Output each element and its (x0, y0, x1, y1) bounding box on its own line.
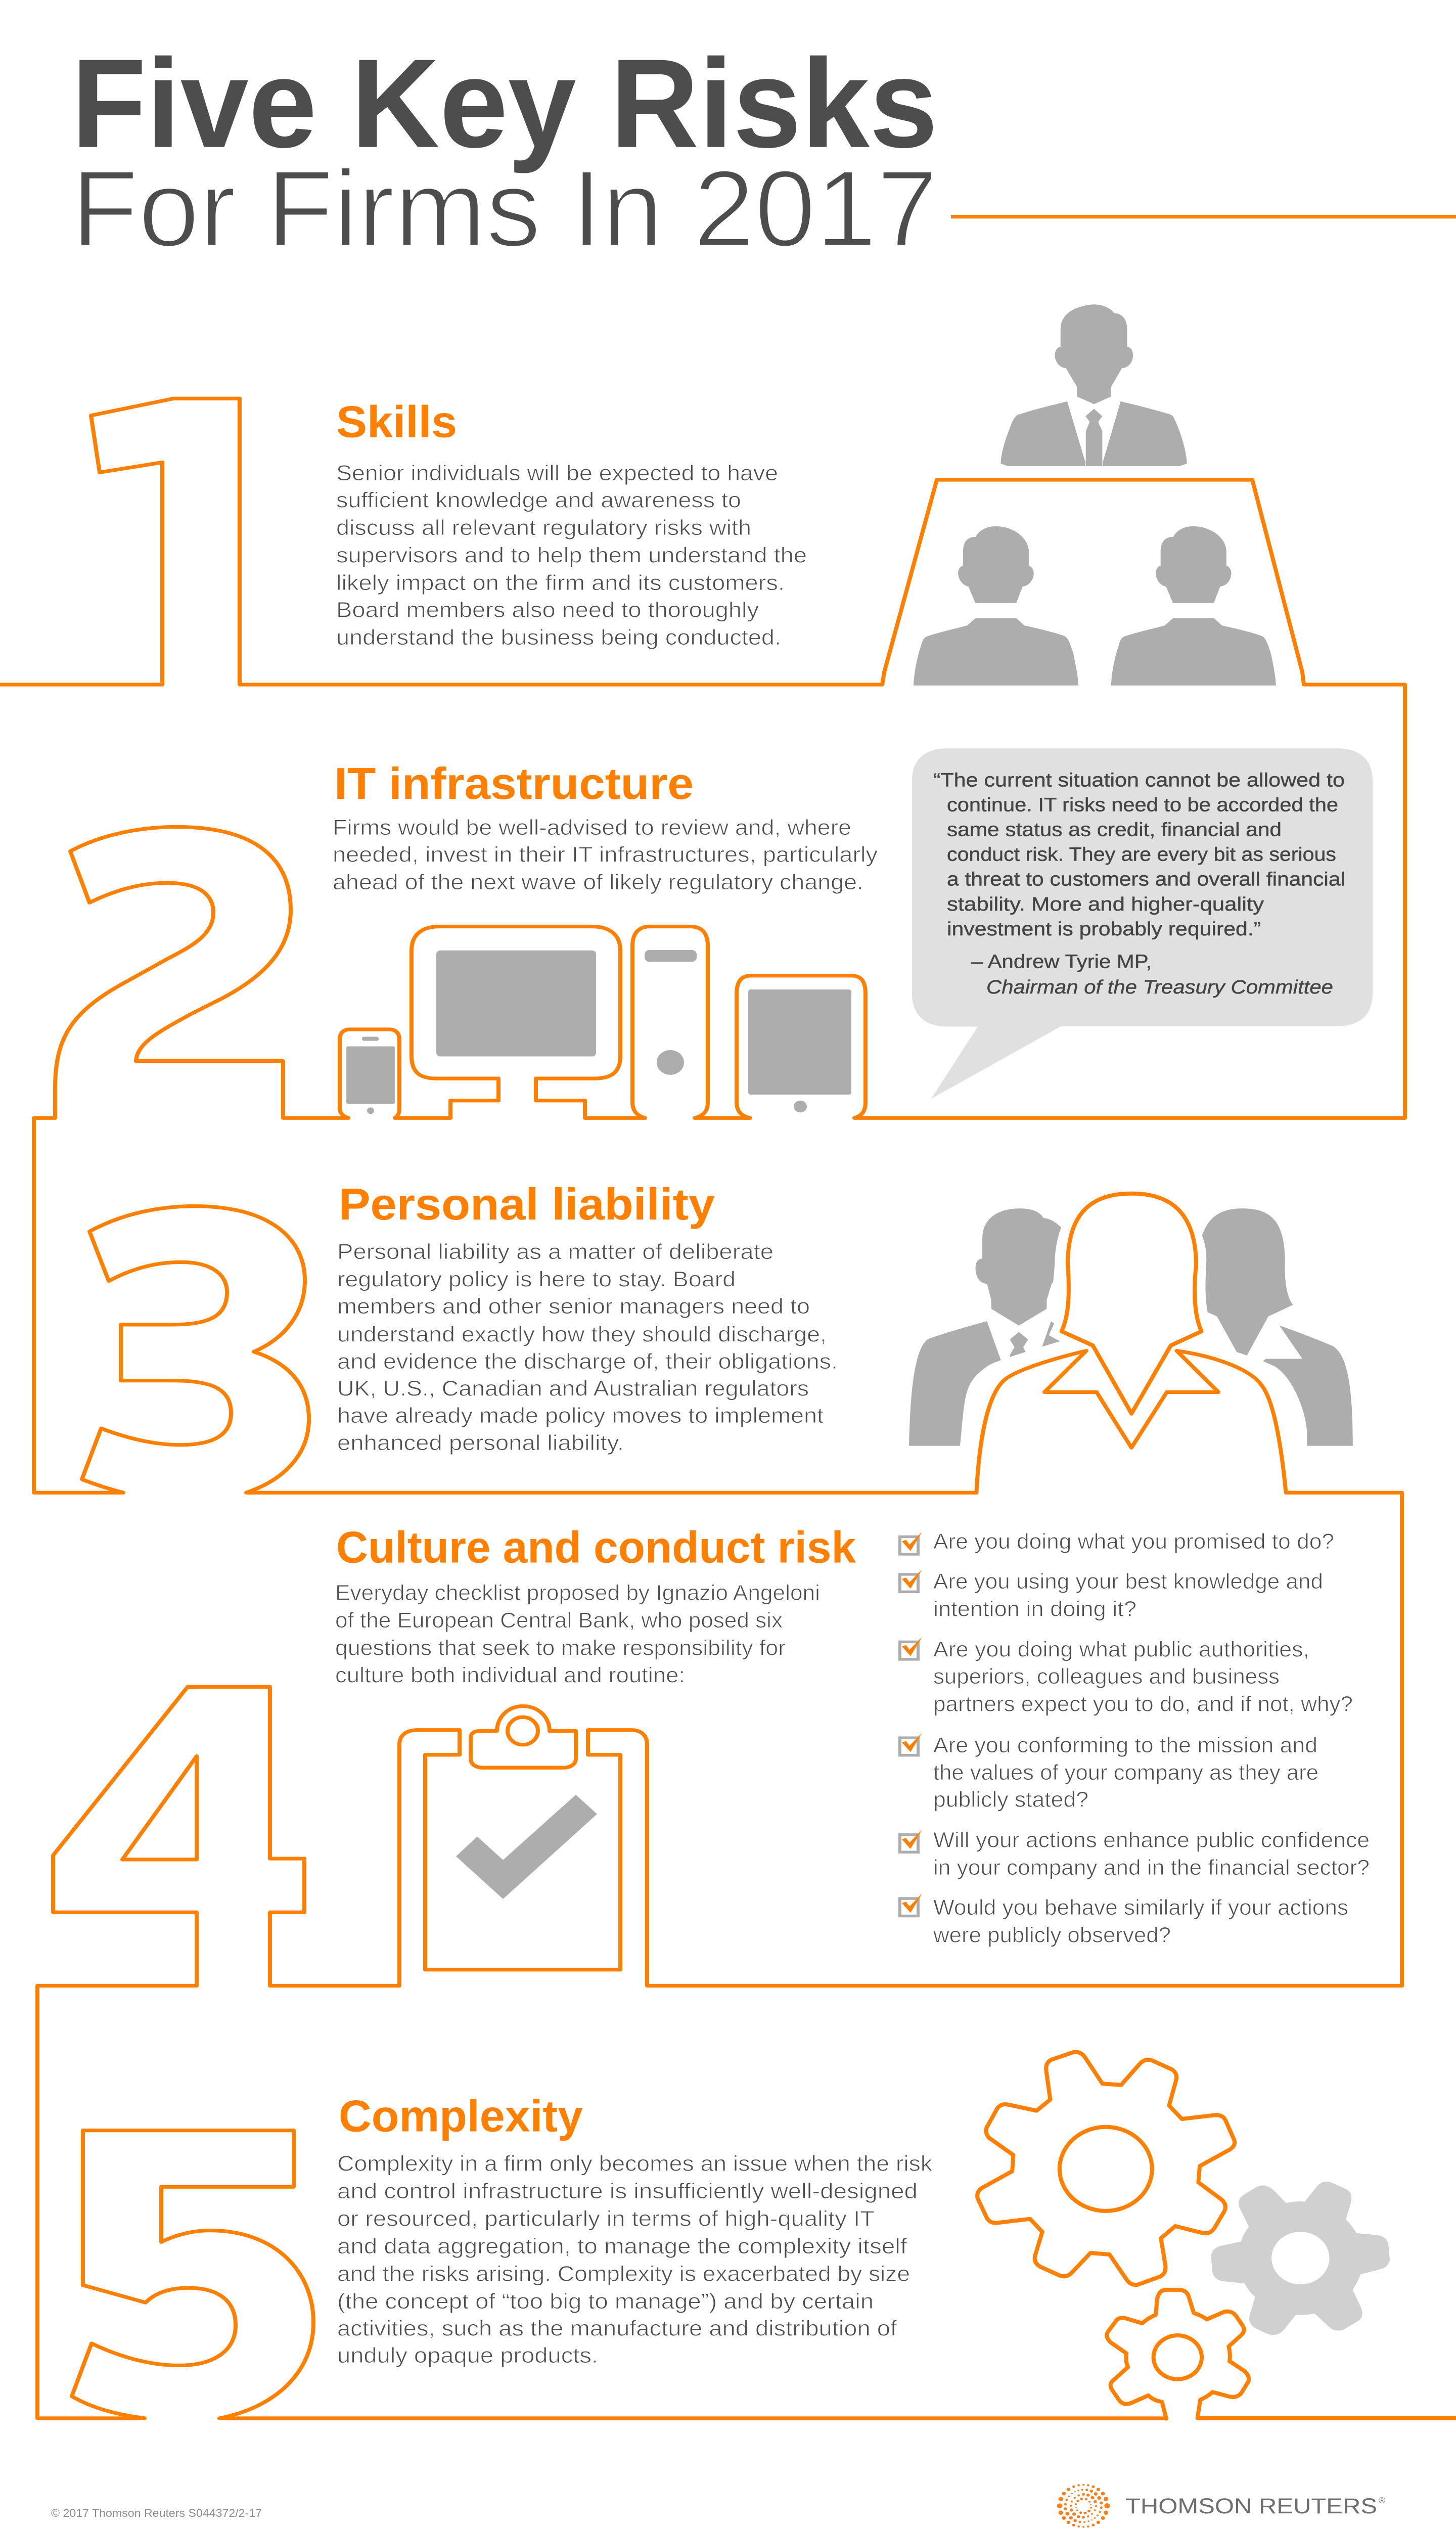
check item 3 (900, 1637, 1353, 1716)
callout: quote bubble: same status as credit, financial and (947, 819, 1282, 840)
icon: small orange gear (1107, 2290, 1456, 2419)
check item 2: intention in doing it? (933, 1597, 1136, 1621)
icon: board members at table (914, 304, 1276, 686)
heading: Skills: Skills (336, 397, 457, 447)
panel: 1 skills (336, 304, 1276, 686)
continuous orange outline forming numerals 1 to 5, table and device shapes (0, 398, 1405, 2418)
logo: Thomson Reuters (1057, 2484, 1386, 2528)
text block: complexity description: activities, such as the manufacture and distribution of (337, 2316, 897, 2340)
text block: skills description: understand the business being conducted. (336, 625, 781, 649)
icon: numeral 4 counter (122, 1756, 197, 1860)
text block: liability description: understand exactly how they should discharge, (337, 1322, 827, 1346)
text block: liability description: members and other senior managers need to (337, 1294, 810, 1319)
icon: three managers (909, 1194, 1353, 1446)
text block: complexity description: Complexity in a firm only becomes an issue when the risk (337, 2151, 933, 2176)
text block: liability description: Personal liability as a matter of deliberate (337, 1239, 774, 1264)
callout: quote bubble: Chairman of the Treasury Committee (986, 977, 1333, 998)
icon: tablet details (748, 989, 851, 1112)
heading: Personal liability: Personal liability (339, 1179, 715, 1229)
check item 4: Are you conforming to the mission and (933, 1733, 1317, 1757)
checklist (900, 1529, 1370, 1947)
text block: skills description: likely impact on the firm and its customers. (336, 570, 785, 595)
panel: 5 complexity (337, 2052, 1456, 2419)
check item 6: were publicly observed? (933, 1922, 1171, 1947)
text block: skills description: Senior individuals will be expected to have (336, 461, 778, 485)
icon: monitor screen (436, 951, 596, 1057)
text block: liability description: have already made policy moves to implement (337, 1403, 824, 1428)
logo wordmark: THOMSON REUTERS (1125, 2494, 1377, 2518)
icon: seated member left (914, 526, 1078, 686)
text block: skills description: supervisors and to help them understand the (336, 543, 807, 567)
icon: male manager (909, 1208, 1061, 1446)
icon: tower details (645, 950, 697, 1075)
text block: skills description (336, 461, 807, 649)
icon: clipboard clip (471, 1706, 576, 1768)
panel: 4 culture and conduct risk (122, 1522, 1370, 1947)
text block: complexity description: and data aggregation, to manage the complexity itself (337, 2234, 907, 2258)
icon: chairman (1000, 304, 1187, 466)
callout: quote bubble: conduct risk. They are every bit as serious (947, 844, 1336, 865)
text block: complexity description: or resourced, particularly in terms of high-quality IT (337, 2206, 875, 2231)
text block: complexity description: (the concept of “too big to manage”) and by certain (337, 2289, 874, 2313)
check item 5: in your company and in the financial sector? (933, 1855, 1370, 1879)
icon: large orange gear (977, 2052, 1235, 2285)
text block: IT description: needed, invest in their IT infrastructures, particularly (333, 842, 878, 867)
text block: culture description: culture both individual and routine: (335, 1662, 685, 1687)
text block: complexity description (337, 2151, 933, 2368)
heading: IT infrastructure: IT infrastructure (334, 758, 694, 808)
title: For Firms In 2017 (71, 148, 938, 269)
icon: device screens (346, 950, 851, 1114)
check item 2: Are you using your best knowledge and (933, 1569, 1323, 1594)
text block: culture description: of the European Central Bank, who posed six (335, 1608, 783, 1633)
check item 4: the values of your company as they are (933, 1760, 1318, 1784)
footer copyright: © 2017 Thomson Reuters S044372/2-17 (51, 2507, 262, 2519)
icon: seated member right (1111, 526, 1276, 686)
icon: gears (977, 2052, 1456, 2419)
text block: culture description (335, 1581, 820, 1687)
callout: quote bubble: a threat to customers and overall financial (947, 869, 1345, 890)
text block: skills description: sufficient knowledge and awareness to (336, 487, 741, 512)
text block: IT description: Firms would be well-advised to review and, where (333, 815, 851, 839)
text block: liability description: regulatory policy is here to stay. Board (337, 1267, 736, 1291)
text block: IT description (333, 815, 878, 894)
callout: quote bubble: – Andrew Tyrie MP, (971, 951, 1152, 972)
icon: central manager head outline (1062, 1194, 1201, 1414)
text block: IT description: ahead of the next wave of likely regulatory change. (333, 870, 863, 894)
text block: skills description: Board members also need to thoroughly (336, 598, 759, 622)
text block: liability description: UK, U.S., Canadian and Australian regulators (337, 1376, 809, 1401)
check item 3: partners expect you to do, and if not, why? (933, 1692, 1353, 1716)
callout: quote bubble: “The current situation cannot be allowed to (933, 770, 1345, 791)
title rule (951, 215, 1456, 219)
panel: 3 personal liability (337, 1179, 1353, 1455)
check item 4 (900, 1733, 1318, 1812)
heading: Culture and conduct risk: Culture and conduct risk (336, 1522, 856, 1572)
check item 6 (900, 1893, 1348, 1947)
text block: liability description: and evidence the discharge of, their obligations. (337, 1349, 838, 1374)
text block: skills description: discuss all relevant regulatory risks with (336, 515, 751, 539)
panel: 2 IT infrastructure (333, 748, 1373, 1114)
text block: complexity description: unduly opaque products. (337, 2343, 598, 2368)
check item 5: Will your actions enhance public confidence (933, 1827, 1370, 1852)
callout: quote bubble: stability. More and higher-quality (947, 893, 1264, 915)
check item 1: Are you doing what you promised to do? (933, 1529, 1334, 1554)
title (71, 32, 938, 269)
title: Five Key Risks (71, 32, 938, 174)
icon: female manager (1202, 1208, 1353, 1446)
heading: Complexity: Complexity (339, 2091, 583, 2141)
check item 2 (900, 1569, 1323, 1621)
text block: complexity description: and control infrastructure is insufficiently well-designed (337, 2179, 918, 2203)
text block: culture description: questions that seek to make responsibility for (335, 1636, 786, 1660)
text block: complexity description: and the risks arising. Complexity is exacerbated by size (337, 2261, 910, 2286)
check item 6: Would you behave similarly if your actions (933, 1895, 1348, 1919)
check item 5 (900, 1827, 1370, 1879)
icon: dotted logo mark (1057, 2484, 1110, 2528)
check item 3: Are you doing what public authorities, (933, 1637, 1309, 1661)
check item 4: publicly stated? (933, 1787, 1088, 1812)
text block: culture description: Everyday checklist proposed by Ignazio Angeloni (335, 1581, 820, 1605)
callout: quote bubble: continue. IT risks need to be accorded the (947, 794, 1338, 816)
icon: phone details (346, 1036, 395, 1114)
icon: clipboard check mark (456, 1795, 597, 1899)
callout: quote bubble: investment is probably required.” (947, 919, 1261, 939)
check item 3: superiors, colleagues and business (933, 1664, 1280, 1689)
icon: grey gear (1211, 2182, 1390, 2335)
text block: liability description: enhanced personal liability. (337, 1430, 624, 1455)
logo registered mark: ® (1379, 2496, 1386, 2505)
text block: liability description (337, 1239, 838, 1455)
callout: quote bubble (912, 748, 1373, 1099)
